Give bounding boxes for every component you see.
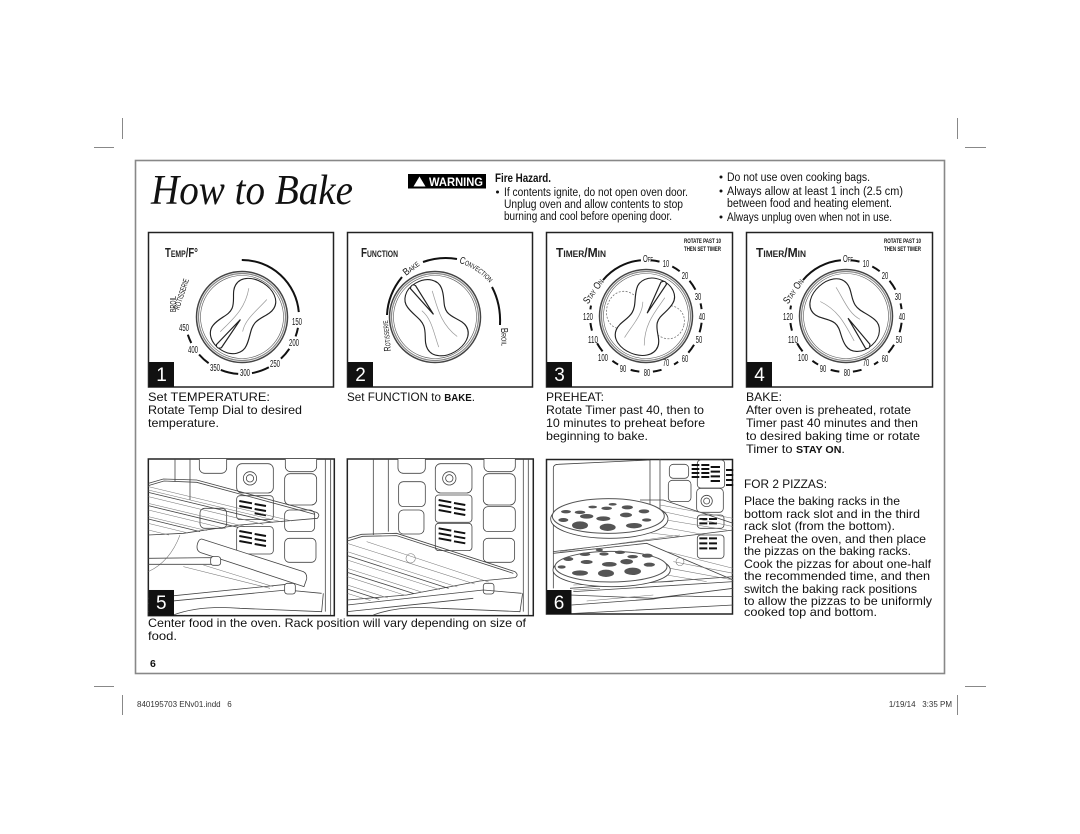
warning label [408, 174, 486, 189]
step 1 text: temperature. [148, 416, 219, 430]
scale labels: Rotisserie [380, 320, 394, 352]
scale labels: 50 [896, 335, 903, 346]
step number 3: 3 [554, 365, 565, 386]
step number 3 [547, 362, 572, 387]
panel 5: oven rack photo-style illustrations [148, 445, 334, 616]
step number 6 [547, 590, 572, 614]
step 1 text [148, 390, 302, 430]
step 3 text: PREHEAT: [546, 390, 604, 404]
dial label: timer: Timer/Min [756, 245, 806, 260]
two pizzas instructions: Preheat the oven, and then place [744, 532, 926, 546]
scale labels: 30 [895, 292, 902, 303]
oven back wall [175, 445, 331, 615]
vent slots [237, 496, 273, 554]
scale labels: Bake [401, 258, 422, 278]
two pizzas instructions: rack slot (from the bottom). [744, 519, 895, 533]
lower rack [347, 533, 517, 601]
title: How to Bake [150, 168, 353, 214]
step 4 text: Timer to STAY ON. [746, 442, 845, 456]
step 4 text: to desired baking time or rotate [746, 429, 920, 443]
dial knob [390, 272, 480, 363]
step 2 text: Set FUNCTION to BAKE. [347, 390, 475, 404]
rotate note: THEN SET TIMER [684, 247, 721, 253]
scale labels: 60 [882, 354, 889, 365]
scale labels: 70 [863, 358, 870, 369]
scale labels: 110 [588, 335, 598, 346]
caption under rack panels: food. [148, 629, 177, 643]
two pizzas instructions: bottom rack slot and in the third [744, 507, 920, 521]
scale labels: Off [643, 254, 653, 265]
scale labels [781, 254, 906, 379]
scale labels: 30 [695, 292, 702, 303]
warning label: WARNING [429, 175, 483, 189]
scale labels: Convection [460, 257, 493, 282]
scale labels: 10 [863, 259, 870, 270]
rack rail [148, 535, 323, 615]
step 3 text [546, 390, 705, 443]
pizza lower [553, 549, 670, 587]
scale labels: 150 [292, 317, 302, 328]
lower rack wires [553, 543, 733, 592]
panel 6: two pizzas on racks [546, 459, 733, 614]
two pizzas instructions: the recommended time, and then [744, 569, 930, 583]
scale labels: 400 [188, 345, 198, 356]
step 3 text: beginning to bake. [546, 429, 648, 443]
scale labels: ROTISSERIE [172, 278, 191, 311]
icon: warning triangle [414, 176, 426, 186]
panel 4: timer dial bake [746, 232, 932, 387]
scale arcs [387, 258, 500, 325]
safety bullets: between food and heating element. [727, 198, 892, 210]
lower shelf [570, 588, 733, 614]
safety bullets: Always allow at least 1 inch (2.5 cm) [727, 186, 903, 198]
dial knob with ghost position [600, 270, 692, 362]
scale arc [585, 255, 707, 377]
rotate note [684, 239, 721, 253]
upper rack wires [553, 500, 733, 552]
step number 2 [348, 362, 373, 387]
safety bullets: Do not use oven cooking bags. [727, 172, 870, 184]
step number 1: 1 [156, 365, 167, 386]
step 4 text: BAKE: [746, 390, 782, 404]
scale labels: 80 [644, 368, 651, 379]
lower rail [347, 583, 523, 615]
safety bullets: Always unplug oven when not in use. [727, 212, 892, 224]
scale labels [581, 254, 706, 379]
upper rack [148, 479, 319, 535]
dial knob [800, 270, 892, 362]
scale labels: 100 [798, 353, 808, 364]
scale labels: 40 [899, 312, 906, 323]
caption under rack panels [148, 616, 527, 643]
scale labels: Stay On [581, 277, 606, 306]
vent slots [435, 495, 472, 551]
scale labels: Stay On [781, 277, 806, 306]
scale labels: 120 [783, 312, 793, 323]
dial label: temp: Temp/F° [165, 246, 198, 260]
scale labels: Broil [498, 328, 510, 346]
two pizzas instructions: Place the baking racks in the [744, 494, 900, 508]
panel 5b: oven with rack in lower position [347, 445, 533, 616]
fire hazard text [495, 173, 688, 223]
fire hazard text: Unplug oven and allow contents to stop [504, 199, 683, 211]
panel 2: function dial [346, 232, 534, 388]
scale labels: 50 [696, 335, 703, 346]
page number: 6 [150, 658, 156, 670]
two pizzas instructions: the pizzas on the baking racks. [744, 544, 911, 558]
rotate note: THEN SET TIMER [884, 247, 921, 253]
step 3 text: Rotate Timer past 40, then to [546, 403, 704, 417]
fire hazard text: burning and cool before opening door. [504, 211, 672, 223]
step number 2: 2 [355, 365, 366, 386]
two pizzas instructions: switch the baking rack positions [744, 582, 917, 596]
scale labels [380, 257, 510, 352]
step number 5: 5 [156, 593, 167, 614]
step 3 text: 10 minutes to preheat before [546, 416, 705, 430]
step 1 text: Rotate Temp Dial to desired [148, 403, 302, 417]
fire hazard text: If contents ignite, do not open oven door. [504, 187, 688, 199]
fire hazard text: Fire Hazard. [495, 173, 551, 185]
scale labels: 60 [682, 354, 689, 365]
scale labels: 100 [598, 353, 608, 364]
step number 5 [149, 590, 174, 616]
oven interior [553, 459, 733, 588]
scale labels: 200 [289, 338, 299, 349]
two pizzas instructions: Cook the pizzas for about one-half [744, 557, 932, 571]
two pizzas instructions: cooked top and bottom. [744, 605, 877, 619]
scale arc [185, 260, 299, 374]
scale labels: 120 [583, 312, 593, 323]
scale labels: 20 [682, 271, 689, 282]
scale labels: 300 [240, 368, 250, 379]
scale arc [785, 255, 907, 377]
crop marks [94, 118, 986, 715]
step 4 text: Timer past 40 minutes and then [746, 416, 918, 430]
step 1 text: Set TEMPERATURE: [148, 390, 270, 404]
dial knob [196, 271, 288, 362]
footer right: 1/19/14 3:35 PM [889, 700, 952, 709]
dial label: timer: Timer/Min [556, 245, 606, 260]
scale labels: 90 [620, 364, 627, 375]
rotate note: ROTATE PAST 10 [884, 239, 921, 245]
scale labels: 350 [210, 363, 220, 374]
oven back wall [373, 445, 528, 615]
scale labels [169, 278, 302, 379]
footer left: 840195703 ENv01.indd 6 [137, 700, 232, 709]
two pizzas instructions: FOR 2 PIZZAS: [744, 477, 827, 491]
scale labels: 450 [179, 323, 189, 334]
safety bullets [720, 172, 903, 224]
two pizzas instructions [744, 477, 932, 619]
step number 6: 6 [554, 593, 564, 614]
scale labels: 70 [663, 358, 670, 369]
scale labels: 40 [699, 312, 706, 323]
dial label: function: Function [361, 245, 398, 260]
panel 1: temperature dial [148, 232, 334, 387]
scale labels: Off [843, 254, 853, 265]
caption under rack panels: Center food in the oven. Rack position will vary depending on size of [148, 616, 527, 630]
scale labels: 110 [788, 335, 798, 346]
rotate note: ROTATE PAST 10 [684, 239, 721, 245]
page frame [136, 160, 944, 674]
step 4 text: After oven is preheated, rotate [746, 403, 911, 417]
scale labels: BROIL [169, 296, 178, 312]
scale labels: 80 [844, 368, 851, 379]
scale labels: 20 [882, 271, 889, 282]
rotate note [884, 239, 921, 253]
scale labels: 90 [820, 364, 827, 375]
step 4 text [746, 390, 920, 456]
pizza upper [551, 499, 668, 538]
panel 3: timer dial preheat [546, 232, 732, 387]
two pizzas instructions: to allow the pizzas to be uniformly [744, 594, 932, 608]
step number 4: 4 [754, 365, 765, 386]
scale labels: 10 [663, 259, 670, 270]
step number 4 [747, 362, 772, 387]
step number 1 [149, 362, 174, 387]
scale labels: 250 [270, 359, 280, 370]
